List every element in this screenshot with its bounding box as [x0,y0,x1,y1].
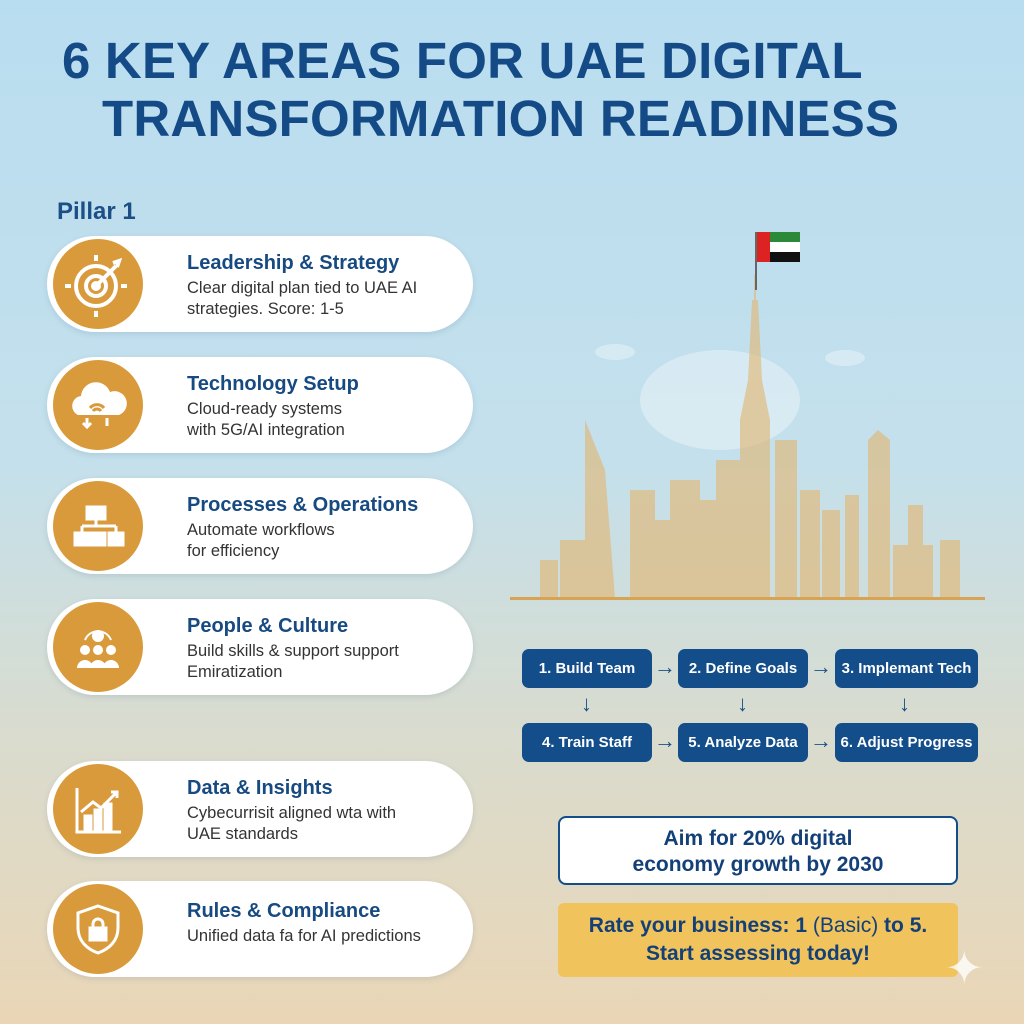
card: processes: Automate workflows [187,521,335,539]
flow diagram: ↓ [581,691,592,716]
skyline illustration [510,232,985,600]
card: rules: Rules & Compliance [187,900,380,922]
card: technology [47,357,473,453]
card: processes [47,478,473,574]
icon: chart [53,764,143,854]
card: data [47,761,473,857]
title: 6 KEY AREAS FOR UAE DIGITAL [62,32,863,89]
card: technology: with 5G/AI integration [187,421,345,439]
icon: flowchart [53,481,143,571]
card: people: People & Culture [187,615,348,637]
flow diagram: 1. Build Team [539,660,635,677]
flow diagram: → [654,728,676,753]
card: rules [47,881,473,977]
card: people [47,599,473,695]
flow diagram [522,649,978,762]
card: technology: Technology Setup [187,373,359,395]
card: people: Build skills & support support [187,642,399,660]
card: leadership: Leadership & Strategy [187,252,399,274]
flow diagram: 6. Adjust Progress [840,734,972,751]
card: data: Cybecurrisit aligned wta with [187,804,396,822]
card: processes: Processes & Operations [187,494,418,516]
flow diagram: 2. Define Goals [689,660,797,677]
icon: cloud [53,360,143,450]
card: leadership [47,236,473,332]
callout: growth target: Aim for 20% digital [663,827,853,850]
flow diagram: 4. Train Staff [542,734,632,751]
flow diagram: ↓ [737,691,748,716]
flow diagram: → [810,728,832,753]
callout: growth target: economy growth by 2030 [633,853,883,876]
icon: target [53,239,143,329]
title: TRANSFORMATION READINESS [102,90,899,147]
callout: rate business: Rate your business: 1 (Basic) to 5. [589,914,927,937]
flow diagram: 3. Implemant Tech [842,660,971,677]
card: people: Emiratization [187,663,282,681]
callout: rate business [558,903,958,977]
flow diagram: 5. Analyze Data [688,734,798,751]
flow diagram: ↓ [899,691,910,716]
flow diagram: → [810,654,832,679]
pillar label: Pillar 1 [57,198,136,225]
icon: sparkle: ✦ [945,942,984,994]
icon: shield lock [53,884,143,974]
flow diagram: → [654,654,676,679]
callout: rate business: Start assessing today! [646,942,870,965]
card: rules: Unified data fa for AI predictions [187,927,421,945]
card: leadership: strategies. Score: 1-5 [187,300,344,318]
callout: growth target [558,816,958,885]
card: data: UAE standards [187,825,298,843]
card: data: Data & Insights [187,777,333,799]
icon: people [53,602,143,692]
card: processes: for efficiency [187,542,279,560]
card: technology: Cloud-ready systems [187,400,342,418]
title [62,32,899,147]
card: leadership: Clear digital plan tied to UAE AI [187,279,417,297]
